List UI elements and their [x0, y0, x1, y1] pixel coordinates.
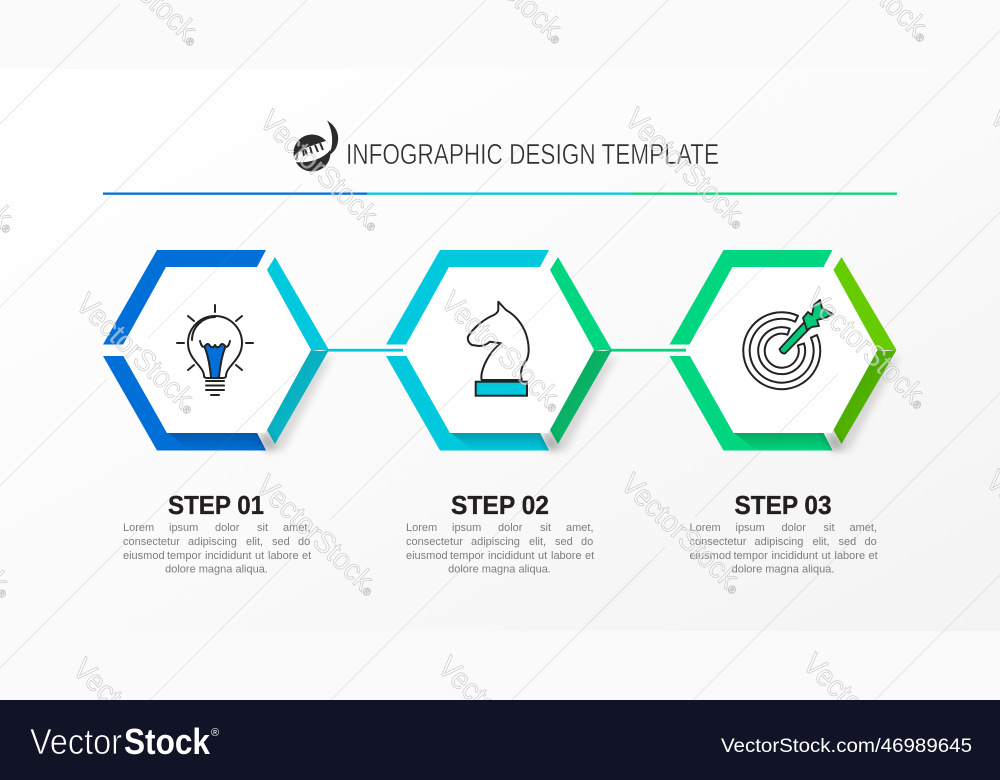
footer image id: VectorStock.com/46989645 [721, 735, 972, 757]
step 3 description: amet, [850, 522, 877, 534]
hexagon right bar [834, 257, 896, 350]
text block: step 1 [123, 490, 311, 576]
step 2 description: et [585, 550, 594, 562]
hexagon upper frame [386, 250, 549, 344]
icon: target with dart [743, 300, 833, 389]
step 3 heading: STEP 03 [734, 490, 832, 520]
icon: chess knight [468, 302, 529, 396]
icon: light bulb [177, 305, 253, 395]
step 1 description: et [302, 550, 311, 562]
step 3 description: consectetur [690, 536, 747, 548]
step 3 description: incididunt [772, 550, 818, 562]
footer bar [0, 700, 1000, 780]
watermarks: VectorStock® [253, 104, 389, 237]
step 3 description: dolor [782, 522, 806, 534]
step 3 description: ut [822, 550, 831, 562]
step 2 description: amet, [566, 522, 594, 534]
step 3 description: ipsum [736, 522, 765, 534]
step 3 description: do [864, 536, 877, 548]
step 1 description: do [298, 536, 310, 548]
background: central panel [0, 69, 1000, 631]
step 3 description: elit, [812, 536, 830, 548]
step 2 description: labore [551, 550, 582, 562]
step 1 description: tempor [167, 550, 202, 562]
white hexagon [686, 267, 878, 433]
panel: step 3 hexagon [670, 250, 900, 452]
step 1 description: labore [268, 550, 299, 562]
footer brand logo [30, 721, 219, 762]
hexagon upper frame [670, 250, 832, 344]
step 2 description: ut [538, 550, 547, 562]
step 2 description: sit [540, 522, 551, 534]
hexagon lower frame [670, 356, 832, 450]
watermarks: VectorStock® [434, 285, 570, 418]
step 3 description: et [868, 550, 878, 562]
step 1 description: sed [272, 536, 290, 548]
watermarks: VectorStock® [618, 102, 754, 235]
step 2 description: eiusmod [406, 550, 448, 562]
step 3 description: tempor [734, 550, 768, 562]
step 3 description: eiusmod [690, 550, 731, 562]
footer brand logo: Stock [124, 721, 211, 762]
step 2 description: Lorem [406, 522, 437, 534]
step 1 description: elit, [246, 536, 263, 548]
step 2 description: dolor [498, 522, 523, 534]
step 2 description: incididunt [488, 550, 534, 562]
text block: step 3 [690, 490, 878, 576]
watermarks: VectorStock® [614, 467, 750, 600]
text block: step 2 [406, 490, 594, 576]
hexagon lower frame [103, 356, 266, 450]
title logo icon [288, 120, 338, 172]
white hexagon [403, 267, 594, 433]
hexagon right bar [267, 257, 329, 350]
step 2 description: do [581, 536, 593, 548]
step 1 description: ipsum [169, 522, 198, 534]
hexagon lower frame [386, 356, 549, 450]
step 2 description: consectetur [406, 536, 463, 548]
connector arrow: step 1 to step 2 [326, 349, 403, 352]
step 3 description: adipiscing [754, 536, 803, 548]
title: INFOGRAPHIC DESIGN TEMPLATE [346, 139, 719, 171]
white hexagon [120, 267, 311, 433]
background: top band [0, 0, 1000, 69]
step 1 description: incididunt [205, 550, 251, 562]
step 1 description: amet, [283, 522, 311, 534]
panel: step 2 hexagon [386, 250, 617, 452]
connector arrow: step 2 to step 3 [609, 349, 686, 352]
footer brand logo: Vector [30, 721, 122, 762]
step 1 description: sit [257, 522, 268, 534]
watermarks: VectorStock® [69, 287, 205, 420]
step 2 description: dolore magna aliqua. [448, 564, 551, 576]
step 2 description: adipiscing [471, 536, 520, 548]
hexagon upper frame [103, 250, 266, 344]
step 1 description: consectetur [123, 536, 180, 548]
step 1 description: eiusmod [123, 550, 165, 562]
step 2 description: ipsum [452, 522, 481, 534]
step 1 description: adipiscing [188, 536, 237, 548]
step 1 description: dolore magna aliqua. [165, 564, 268, 576]
step 2 description: sed [555, 536, 573, 548]
step 3 description: Lorem [690, 522, 721, 534]
step 3 description: dolore magna aliqua. [732, 564, 834, 576]
panel: step 1 hexagon [103, 250, 334, 452]
watermarks: VectorStock® [249, 469, 385, 602]
watermarks: VectorStock® [799, 282, 935, 415]
watermarks: VectorStock® [796, 647, 932, 780]
step 1 description: ut [255, 550, 264, 562]
step 2 description: tempor [450, 550, 485, 562]
step 1 heading: STEP 01 [168, 490, 264, 520]
step 1 description: Lorem [123, 522, 154, 534]
hexagon right bar [550, 257, 612, 350]
step 2 description: elit, [529, 536, 546, 548]
footer brand logo: ® [211, 727, 219, 739]
background: lower band [0, 631, 1000, 700]
step 2 heading: STEP 02 [451, 490, 549, 520]
title rule [103, 192, 897, 195]
step 3 description: labore [834, 550, 865, 562]
step 3 description: sed [838, 536, 856, 548]
step 3 description: sit [824, 522, 834, 534]
step 1 description: dolor [215, 522, 240, 534]
